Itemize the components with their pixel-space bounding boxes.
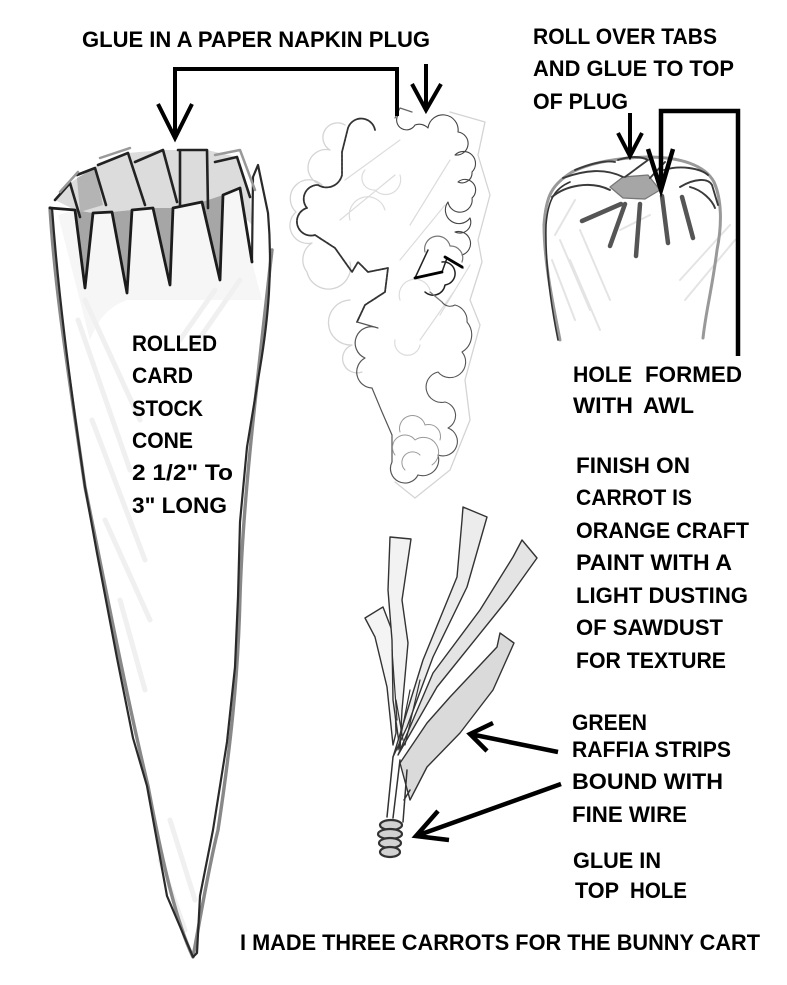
drawing: green raffia strips bound with wire xyxy=(365,507,537,857)
pencil hatching xyxy=(78,280,240,930)
faint hatching xyxy=(552,200,735,330)
folded tabs xyxy=(552,157,718,208)
right scalloped edge xyxy=(397,115,476,255)
arrow: pointing at plug top xyxy=(412,64,441,110)
outer edge dark xyxy=(52,165,270,957)
caption: three carrots: I MADE THREE CARROTS FOR THE BUNNY CART xyxy=(240,930,760,955)
label: finish on carrot: FINISH ON xyxy=(576,453,690,478)
left scalloped edge xyxy=(297,119,388,322)
arrow: napkin plug into cone xyxy=(158,69,397,138)
label: rolled card stock cone: CARD xyxy=(132,363,193,388)
label: hole formed with awl: AWL xyxy=(643,393,694,418)
label: hole formed with awl: WITH xyxy=(573,393,633,418)
center plug xyxy=(610,175,660,199)
label: green raffia strips: RAFFIA STRIPS xyxy=(572,737,731,762)
label: hole formed with awl: FORMED xyxy=(645,362,742,387)
label: roll over tabs xyxy=(533,24,734,114)
label: hole formed with awl: HOLE xyxy=(573,362,632,387)
label: finish on carrot: OF SAWDUST xyxy=(576,615,723,640)
label: hole formed with awl xyxy=(573,362,742,418)
label: roll over tabs: OF PLUG xyxy=(533,89,628,114)
label: rolled card stock cone: 3" LONG xyxy=(132,493,227,518)
label: finish on carrot xyxy=(576,453,749,673)
label: roll over tabs: ROLL OVER TABS xyxy=(533,24,717,49)
wire binding xyxy=(378,820,402,857)
notch shading xyxy=(75,195,223,293)
body outline xyxy=(544,157,720,340)
label: rolled card stock cone: 2 1/2" To xyxy=(132,460,233,485)
label: glue in top hole: TOP xyxy=(575,878,619,903)
label: finish on carrot: LIGHT DUSTING xyxy=(576,583,748,608)
slits xyxy=(582,196,693,256)
label: rolled card stock cone: CONE xyxy=(132,428,193,453)
label: finish on carrot: ORANGE CRAFT xyxy=(576,518,749,543)
rim and tabs xyxy=(50,188,252,293)
bottom tip scribble xyxy=(393,416,441,470)
arrow: pointing at rolled tabs xyxy=(618,113,642,156)
drawing: plug glued into cone top xyxy=(544,157,735,340)
label: green raffia strips: BOUND WITH xyxy=(572,769,723,794)
label: glue in top hole: HOLE xyxy=(630,878,687,903)
label: green raffia strips xyxy=(572,710,731,827)
label: glue in top hole xyxy=(573,848,687,903)
arrow: to fine wire xyxy=(416,784,561,840)
label: finish on carrot: CARROT IS xyxy=(576,485,692,510)
cone inside shading xyxy=(55,150,252,225)
arrow: hole formed with awl xyxy=(648,111,738,356)
drawing: paper napkin plug xyxy=(290,108,490,498)
label: green raffia strips: FINE WIRE xyxy=(572,802,687,827)
outer edge grey xyxy=(50,208,272,957)
heading: glue in a paper napkin plug: GLUE IN A PAPER NAPKIN PLUG xyxy=(82,27,430,52)
faint outer scribble xyxy=(290,112,490,498)
label: rolled card stock cone: ROLLED xyxy=(132,331,217,356)
label: green raffia strips: GREEN xyxy=(572,710,647,735)
label: roll over tabs: AND GLUE TO TOP xyxy=(533,56,734,81)
label: rolled card stock cone xyxy=(132,331,233,518)
label: finish on carrot: PAINT WITH A xyxy=(576,550,732,575)
label: rolled card stock cone: STOCK xyxy=(132,396,204,421)
drawing: rolled card stock cone xyxy=(50,148,272,957)
dark squiggle xyxy=(415,250,463,295)
arrow: to green raffia xyxy=(470,723,558,752)
label: glue in top hole: GLUE IN xyxy=(573,848,661,873)
label: finish on carrot: FOR TEXTURE xyxy=(576,648,726,673)
